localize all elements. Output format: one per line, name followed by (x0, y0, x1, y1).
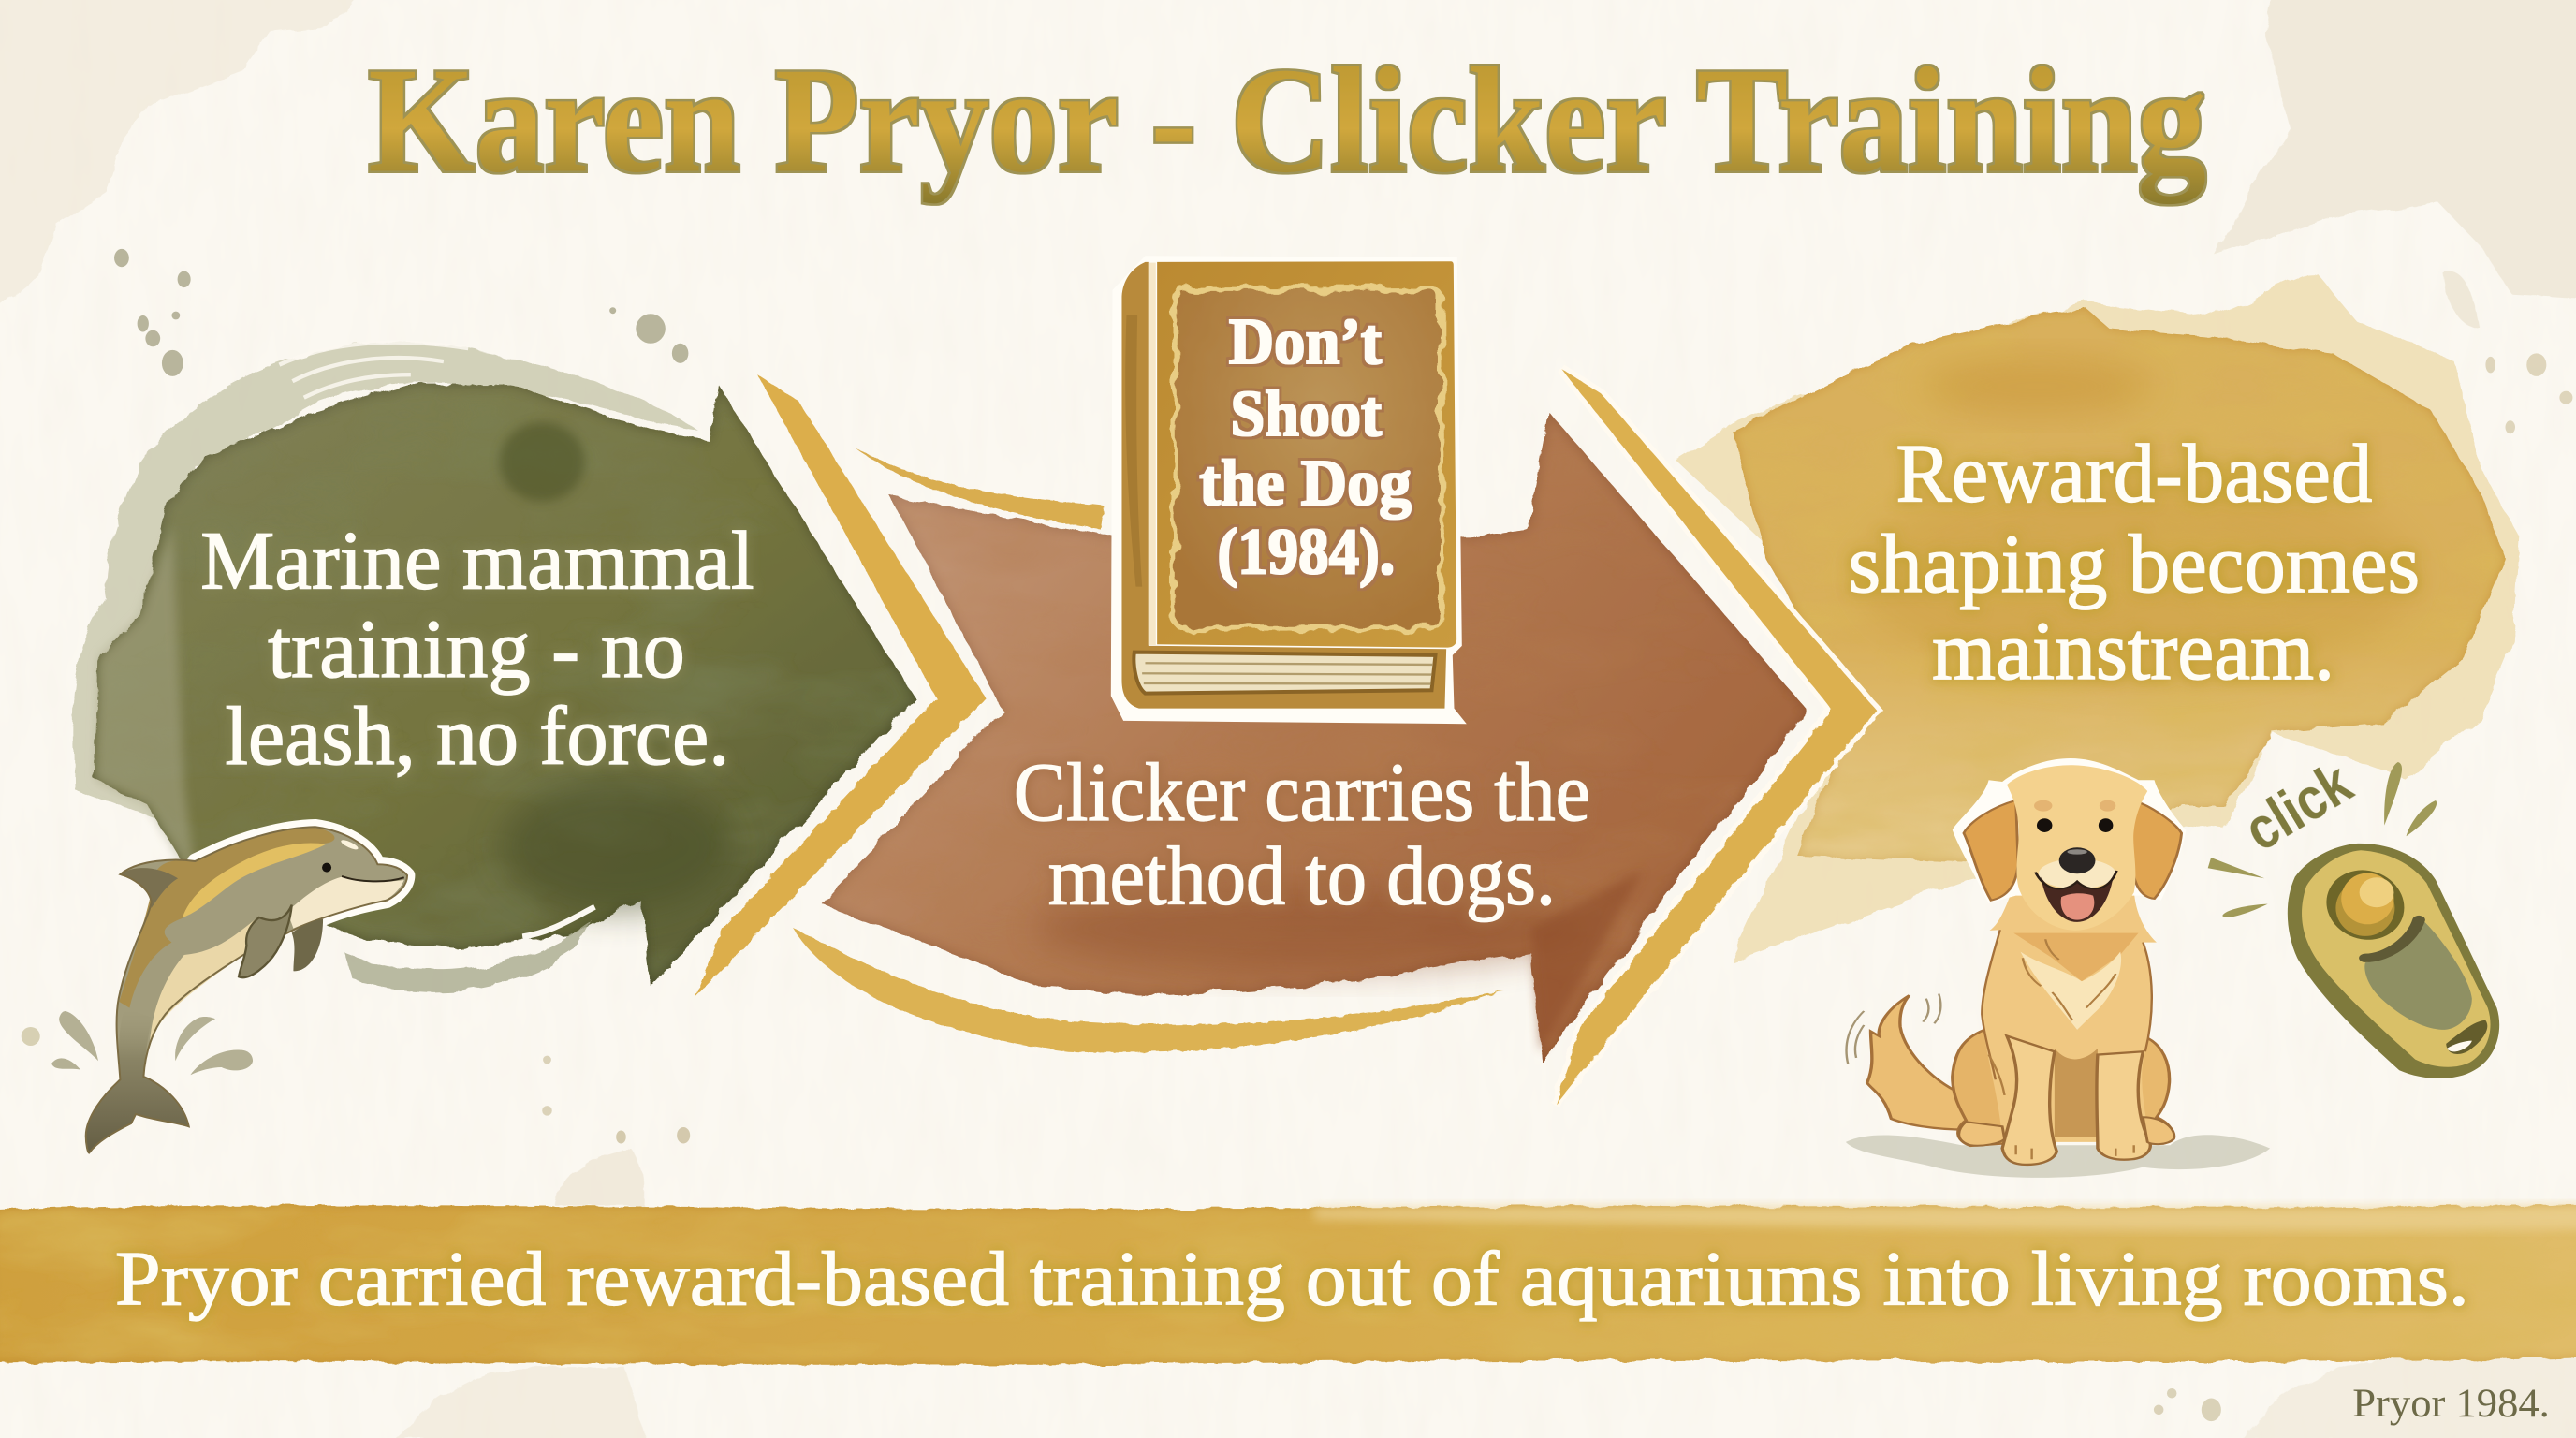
text: step one caption: Marine mammal (200, 514, 754, 607)
torso side outlines (1982, 930, 2152, 1079)
text: step one caption: training - no (268, 603, 685, 696)
text: step two caption: method to dogs. (1048, 829, 1556, 922)
panel: clicker brown arrow (822, 413, 1808, 1062)
paint splatter dots (114, 249, 2572, 1421)
deep pigment under caption (1035, 886, 1593, 971)
chevron: gold divider one (695, 374, 986, 997)
dark lower wash (501, 781, 731, 912)
chest light fur (2021, 952, 2121, 1030)
muzzle (2039, 858, 2115, 888)
cream belly rear (150, 919, 256, 1042)
pages (1134, 653, 1435, 694)
ear left (1964, 800, 2018, 901)
pigment pool behind caption (1856, 468, 2415, 682)
dark pigment spot (500, 422, 585, 501)
dorsal fin (120, 868, 178, 908)
icon: leaping dolphin (22, 827, 407, 1153)
panel: reward-based shaping gold blob (1676, 271, 2520, 961)
pale outer wash (1676, 271, 2520, 961)
book title text: Shoot (1231, 377, 1383, 450)
dolphin outline (86, 827, 407, 1153)
slot opening (2447, 1041, 2472, 1051)
ear right (2130, 800, 2182, 899)
darker arrow head (1531, 871, 1643, 1051)
spine (1121, 262, 1446, 709)
sticker outline (1111, 256, 1467, 724)
button top (2341, 873, 2393, 924)
brows (2034, 800, 2052, 812)
cover (1157, 261, 1456, 648)
white brush slash (522, 907, 594, 936)
text: step three caption (1848, 427, 2420, 697)
smile line (2036, 871, 2116, 888)
torso (1982, 880, 2157, 1142)
rear paws (1959, 1117, 2174, 1146)
water droplet (22, 1027, 40, 1046)
haunch right (2115, 1036, 2173, 1144)
front leg right (2097, 1051, 2150, 1160)
lower brush sweep (345, 920, 592, 991)
panel: bottom takeaway banner (0, 1204, 2576, 1365)
text: step two caption (1014, 746, 1590, 922)
water splashes (51, 1011, 253, 1075)
click label: click (2233, 750, 2364, 864)
panel: marine mammal training green arrow (73, 343, 915, 991)
open mouth (2041, 875, 2114, 922)
head sticker halo (1953, 758, 2186, 903)
olive wash behind arrow (73, 344, 698, 822)
dolphin yellow stripe (183, 843, 326, 917)
eye (322, 863, 331, 873)
lanyard slot (2446, 1020, 2487, 1054)
wag marks (1847, 994, 1940, 1064)
button collar (2335, 880, 2394, 936)
nose (2059, 847, 2095, 873)
book title text: (1984). (1218, 516, 1395, 589)
pectoral fin far (292, 919, 323, 971)
ground shadow (1846, 1135, 2270, 1178)
head (2007, 765, 2147, 931)
icon: golden retriever sitting (1846, 758, 2270, 1178)
title: Karen Pryor - Clicker Training (368, 37, 2206, 205)
front leg left (2002, 1036, 2056, 1165)
dolphin body (86, 827, 407, 1153)
dark arc (2365, 920, 2419, 958)
dry brush streaks (279, 343, 468, 398)
text: step two caption: Clicker carries the (1014, 746, 1590, 839)
text: banner takeaway: Pryor carried reward-based training out of aquariums into living rooms. (115, 1236, 2469, 1321)
arrow body (95, 385, 915, 986)
text: step one caption: leash, no force. (225, 690, 729, 783)
dolphin back (119, 828, 334, 1008)
cream belly front (287, 877, 404, 929)
highlight (340, 838, 359, 851)
saturated inner wash (1732, 307, 2505, 862)
text: step three caption: Reward-based (1895, 427, 2372, 520)
eyes (2037, 818, 2052, 832)
tongue (2061, 893, 2094, 920)
book title text: Don’t (1229, 305, 1383, 378)
text: step one caption (200, 514, 754, 783)
gold brush strip upper (855, 447, 1104, 529)
citation: Pryor 1984. (2352, 1381, 2550, 1426)
icon: clicker device (2208, 762, 2499, 1078)
fur strokes (1989, 939, 2134, 1159)
text: step three caption: shaping becomes (1848, 518, 2420, 610)
haunch left (1953, 1028, 2025, 1146)
pigment pool upper (1922, 357, 2152, 416)
text: step three caption: mainstream. (1932, 605, 2334, 697)
head halo (195, 827, 407, 917)
spine shadow stripes (1125, 315, 1142, 587)
mouth (342, 876, 404, 881)
neck shading (2013, 933, 2139, 981)
button highlight (2360, 877, 2393, 907)
dark belly between legs (2055, 1049, 2098, 1137)
pale upper band on right (1314, 1204, 2576, 1231)
book artwork traced group (1111, 256, 1467, 724)
pectoral fin near (239, 905, 292, 977)
gold brush strip lower (792, 927, 1503, 1052)
book title text: the Dog (1199, 447, 1412, 520)
cream gutter (1149, 263, 1156, 645)
click motion rays (2208, 762, 2437, 917)
clicker outer case (2288, 844, 2499, 1078)
pale left bleed (95, 526, 198, 888)
button ring (2320, 867, 2410, 944)
dolphin tail shading (86, 1008, 189, 1153)
icon: book Don't Shoot the Dog (1111, 256, 1467, 724)
chevron: gold divider two (1556, 368, 1876, 1104)
green panel (2364, 917, 2472, 1030)
inner title panel (1175, 289, 1442, 628)
clicker gold face (2302, 850, 2491, 1067)
book title text (1199, 305, 1412, 589)
tail (1867, 995, 1966, 1130)
